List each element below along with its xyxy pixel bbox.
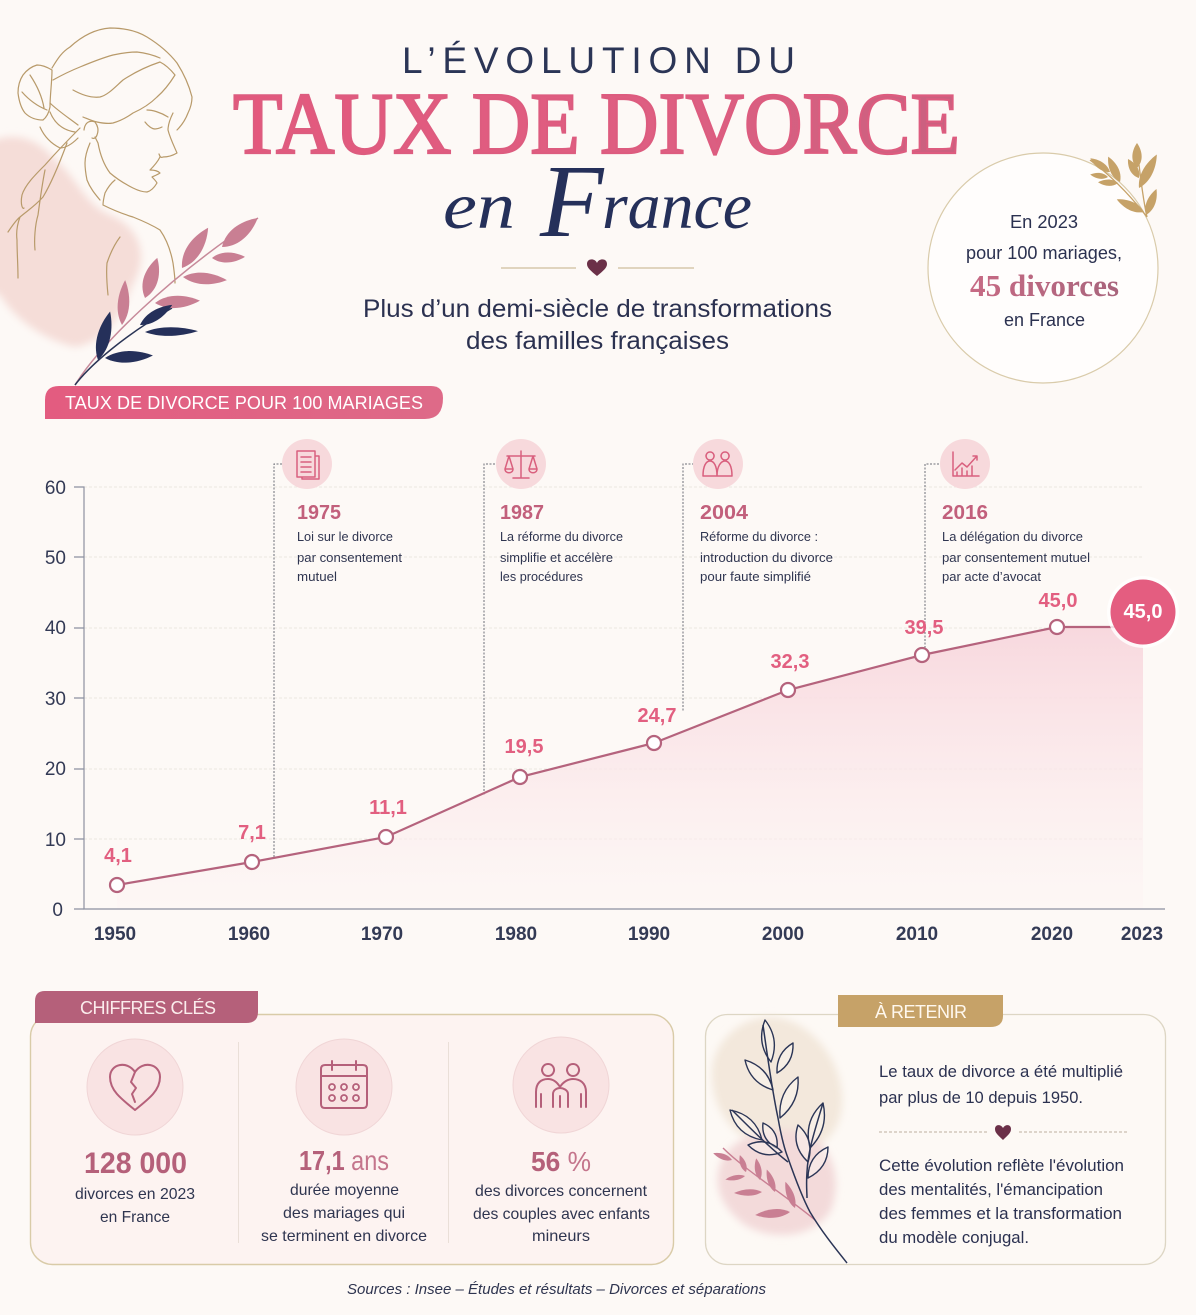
y axis labels: 50 <box>45 548 66 569</box>
y axis labels: 0 <box>52 900 63 921</box>
sources: Sources : Insee – Études et résultats – Divorces et séparations <box>347 1281 766 1298</box>
stat: 56 %: mineurs <box>532 1228 590 1245</box>
event: 1987 <box>496 439 623 584</box>
text: multiplication: Le taux de divorce a été multiplié <box>879 1062 1123 1081</box>
stat: 56 %: des divorces concernent <box>475 1183 648 1200</box>
text: evolution <box>879 1156 1124 1247</box>
stat: 17,1 ans: 17,1 ans <box>299 1145 389 1176</box>
text: evolution: des femmes et la transformation <box>879 1204 1122 1223</box>
icon: rising chart <box>940 439 990 489</box>
line chart <box>45 464 1179 945</box>
text: evolution: Cette évolution reflète l'évolution <box>879 1156 1124 1175</box>
event: 1975 <box>282 439 403 584</box>
x axis labels: 2020 <box>1031 924 1073 945</box>
woman line art <box>8 28 192 295</box>
subtitle: des familles françaises <box>466 327 729 355</box>
event: 2016: 2016 <box>942 502 988 524</box>
text: evolution: des mentalités, l'émancipation <box>879 1180 1103 1199</box>
y axis labels: 60 <box>45 478 66 499</box>
stat: 17,1 ans: se terminent en divorce <box>261 1228 427 1245</box>
event: 1987: les procédures <box>500 570 583 584</box>
data points <box>110 620 1064 892</box>
tab: à retenir <box>838 995 1003 1027</box>
stat: 56 %: 56 % <box>531 1146 591 1177</box>
icon: scales <box>496 439 546 489</box>
watercolor blobs <box>712 1017 842 1153</box>
axes <box>74 487 1165 909</box>
stat: 128 000 <box>75 1039 195 1226</box>
event: 1987: 1987 <box>500 502 544 524</box>
callout: 45 divorces circle: 45 divorces <box>970 268 1119 303</box>
title line 1: L’ÉVOLUTION DU <box>402 40 795 81</box>
tab: chiffres clés: CHIFFRES CLÉS <box>80 998 216 1018</box>
divider with heart <box>501 259 694 276</box>
x axis labels: 2000 <box>762 924 804 945</box>
event: 2004: Réforme du divorce : <box>700 530 818 544</box>
event: 1975: Loi sur le divorce <box>297 530 393 544</box>
text: multiplication <box>879 1062 1123 1107</box>
data line <box>117 627 1143 885</box>
stat: 128 000: 128 000 <box>84 1147 187 1180</box>
grid lines <box>84 487 1143 839</box>
icon: calendar <box>296 1039 392 1135</box>
pink and navy branch <box>75 212 262 385</box>
area under line <box>117 627 1143 909</box>
event: 2016 <box>940 439 1090 584</box>
event leader lines <box>274 464 939 857</box>
event: 2004: introduction du divorce <box>700 551 833 565</box>
data labels: 39,5 <box>905 617 943 639</box>
icon: gold sprig <box>1088 143 1161 217</box>
event: 2016: par consentement mutuel <box>942 551 1090 565</box>
callout: 45 divorces circle: en France <box>1004 310 1085 330</box>
title line 3 script: en <box>443 170 515 243</box>
y axis labels: 30 <box>45 689 66 710</box>
callout: 45 divorces circle: En 2023 <box>1010 212 1078 232</box>
x axis labels: 2010 <box>896 924 938 945</box>
stat: 128 000: divorces en 2023 <box>75 1186 195 1203</box>
title line 3 script: F <box>539 144 605 259</box>
data labels: 19,5 <box>505 736 543 758</box>
text: evolution: du modèle conjugal. <box>879 1228 1029 1247</box>
stat: 128 000: en France <box>100 1209 170 1226</box>
event: 2016: par acte d’avocat <box>942 570 1042 584</box>
y axis labels: 40 <box>45 618 66 639</box>
event: 1975: 1975 <box>297 502 341 524</box>
x axis labels: 1960 <box>228 924 270 945</box>
title <box>233 40 960 259</box>
x axis labels: 1980 <box>495 924 537 945</box>
data labels: 45,0 <box>1039 590 1077 612</box>
stat: 56 %: des couples avec enfants <box>473 1206 650 1223</box>
subtitle: Plus d’un demi-siècle de transformations <box>363 295 832 323</box>
callout: 45 divorces circle <box>928 143 1161 383</box>
pink sprig <box>712 1148 815 1220</box>
watercolor blob <box>0 137 141 347</box>
event: 1987: simplifie et accélère <box>500 551 613 565</box>
event: 2004: 2004 <box>700 502 749 524</box>
navy stem <box>732 1025 847 1263</box>
event: 1975: mutuel <box>297 570 337 584</box>
illustration: line-art branch <box>712 1017 847 1263</box>
data labels: 32,3 <box>771 651 809 673</box>
section tab: taux de divorce: TAUX DE DIVORCE POUR 100 MARIAGES <box>65 393 423 413</box>
badge: 45,0: 45,0 <box>1124 601 1162 623</box>
data labels: 11,1 <box>369 797 407 819</box>
event: 2016: La délégation du divorce <box>942 530 1083 544</box>
section tab: taux de divorce <box>45 386 443 419</box>
subtitle <box>363 295 832 355</box>
icon: couple <box>693 439 743 489</box>
icon: broken heart <box>87 1039 183 1135</box>
event: 2004: pour faute simplifié <box>700 570 811 584</box>
data labels: 7,1 <box>238 822 266 844</box>
icon: couple with children <box>513 1037 609 1133</box>
icon: document <box>282 439 332 489</box>
tab: à retenir: À RETENIR <box>875 1002 967 1022</box>
badge: 45,0 <box>1107 576 1179 648</box>
stat: 17,1 ans: durée moyenne <box>290 1182 399 1199</box>
event: 1975: par consentement <box>297 551 403 565</box>
x axis labels: 1970 <box>361 924 403 945</box>
y axis labels: 20 <box>45 759 66 780</box>
event: 1987: La réforme du divorce <box>500 530 623 544</box>
data labels <box>104 590 1077 867</box>
y axis labels <box>45 478 66 921</box>
x axis labels: 2023 <box>1121 924 1163 945</box>
y axis labels: 10 <box>45 830 66 851</box>
x axis labels: 1950 <box>94 924 136 945</box>
text: multiplication: par plus de 10 depuis 1950. <box>879 1088 1083 1107</box>
stat: 56 % <box>473 1037 650 1245</box>
callout: 45 divorces circle: pour 100 mariages, <box>966 243 1122 263</box>
panel: chiffres clés <box>30 991 674 1264</box>
stat: 17,1 ans: des mariages qui <box>283 1205 405 1222</box>
x axis labels: 1990 <box>628 924 670 945</box>
event: 2004 <box>693 439 833 584</box>
title line 2: TAUX DE DIVORCE <box>233 76 960 173</box>
title line 3 script: rance <box>602 170 752 243</box>
outline leaves <box>730 1020 828 1178</box>
x axis labels <box>94 924 1163 945</box>
data labels: 4,1 <box>104 845 132 867</box>
data labels: 24,7 <box>638 705 676 727</box>
stat: 17,1 ans <box>261 1039 427 1245</box>
divider with heart <box>879 1125 1127 1140</box>
illustration: woman profile with leaves <box>0 28 262 385</box>
panel: à retenir <box>706 995 1166 1264</box>
tab: chiffres clés <box>35 991 258 1023</box>
